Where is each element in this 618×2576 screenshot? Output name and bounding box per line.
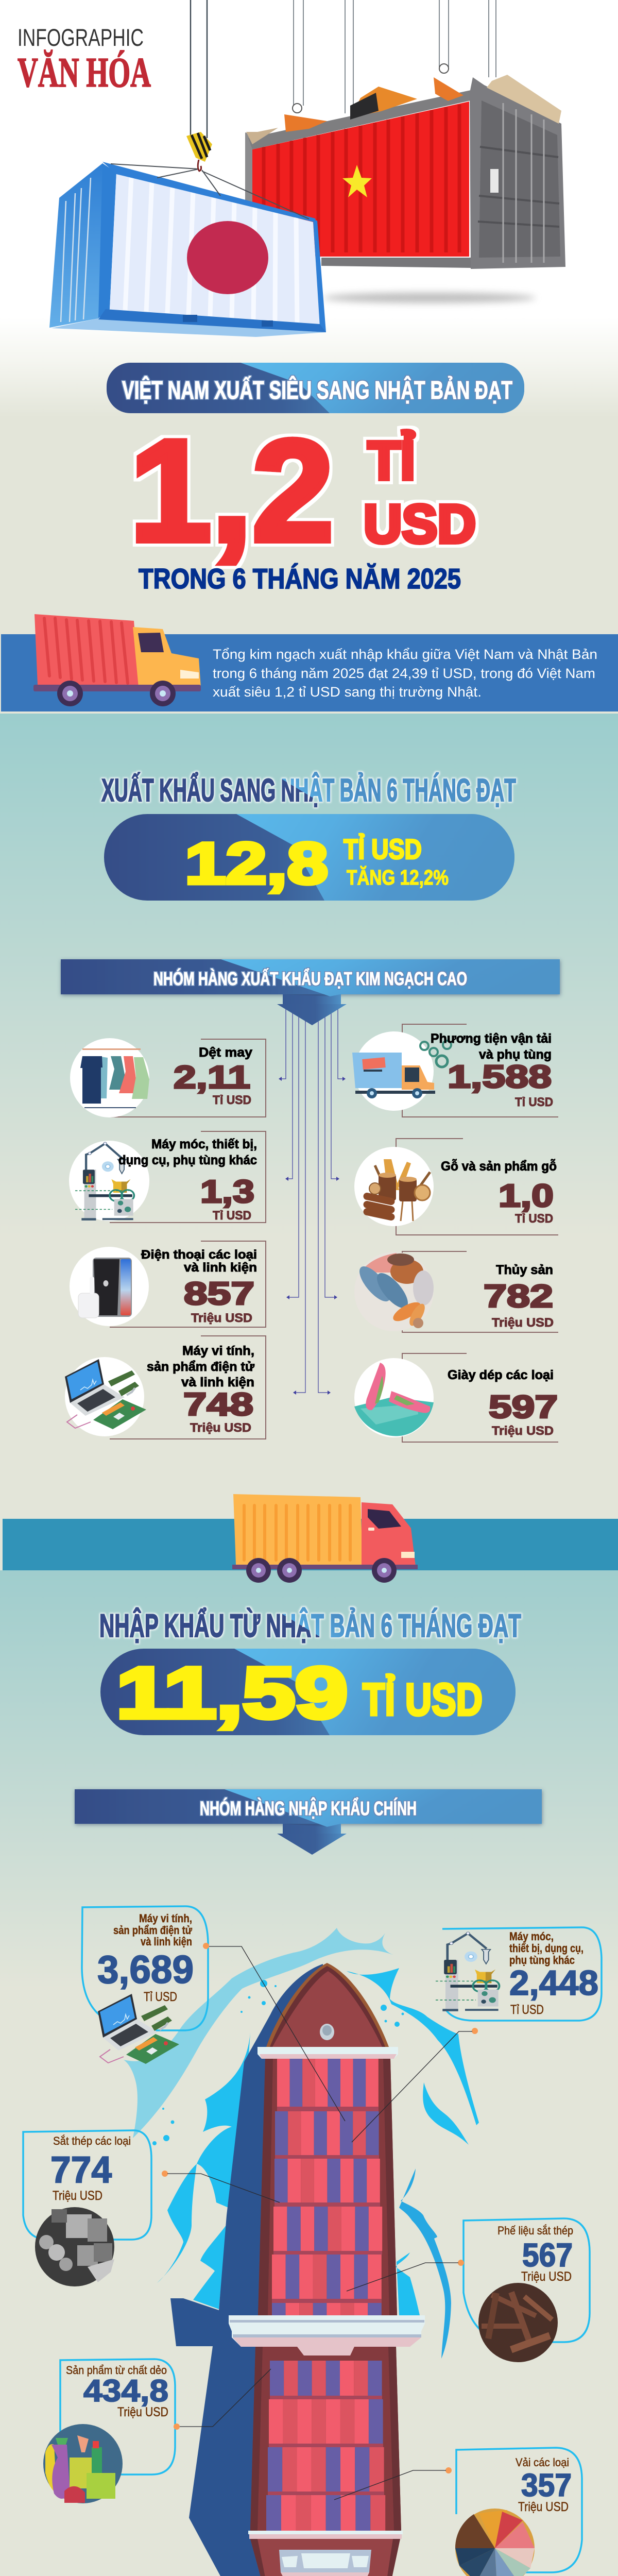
- value: 597: [489, 1389, 558, 1425]
- card: phones: [70, 1241, 266, 1327]
- text block: summary: Tổng kim ngạch xuất nhập khẩu giữa Việt Nam và Nhật Bản: [213, 647, 597, 662]
- banner: export group heading with arrow: [61, 959, 560, 1025]
- icon: steel bars: [35, 2207, 114, 2286]
- leader line: [203, 1943, 345, 2121]
- label: Phế liệu sắt thép: [497, 2224, 573, 2237]
- value: 782: [484, 1279, 553, 1314]
- icon: laptop: [98, 1994, 179, 2064]
- headline value: 1,2 tỉ USD: TỈ: [368, 430, 415, 491]
- text block: summary: [213, 647, 597, 700]
- background: import section gradient: [0, 1570, 618, 2576]
- label: Máy móc,: [509, 1930, 554, 1943]
- label: và phụ tùng: [479, 1047, 552, 1062]
- unit: Tỉ USD: [144, 1990, 177, 2004]
- value: 567: [522, 2236, 573, 2274]
- unit: Triệu USD: [117, 2405, 168, 2419]
- label: Sắt thép các loại: [53, 2134, 131, 2147]
- water splash around ship: [124, 1928, 479, 2576]
- card: vehicles: [352, 1024, 558, 1117]
- pill: import value: 11,59: [116, 1652, 348, 1733]
- deck: forward: [258, 2047, 398, 2059]
- unit: Tỉ USD: [515, 1212, 553, 1226]
- callout: fabrics: [334, 2448, 582, 2576]
- label: Máy vi tính,: [182, 1344, 254, 1358]
- logo: Infographic Văn Hóa: INFOGRAPHIC: [18, 24, 144, 51]
- unit: Triệu USD: [492, 1424, 554, 1438]
- label: phụ tùng khác: [509, 1954, 575, 1967]
- value: 357: [521, 2468, 572, 2503]
- value: 774: [50, 2149, 112, 2191]
- card: machinery: [69, 1131, 266, 1223]
- leader line: [162, 2171, 280, 2202]
- icon: logs and timber: [354, 1147, 434, 1226]
- unit: Tỉ USD: [515, 1095, 553, 1109]
- icon: red truck: [33, 614, 201, 706]
- unit: Triệu USD: [190, 1421, 251, 1435]
- unit: Tỉ USD: [510, 2003, 544, 2017]
- label: Máy móc, thiết bị,: [151, 1137, 257, 1151]
- icon: phone and earbuds: [70, 1247, 149, 1326]
- icon: laptop and circuit board: [65, 1357, 146, 1436]
- headline value: 1,2 tỉ USD: USD: [364, 494, 476, 554]
- logo: Infographic Văn Hóa: [18, 24, 151, 96]
- hero illustration: hanging containers: [49, 0, 565, 337]
- icon: factory machine: [69, 1141, 149, 1221]
- logo: Infographic Văn Hóa: VĂN HÓA: [18, 49, 151, 96]
- leader line: [352, 2028, 478, 2142]
- label: [141, 1248, 257, 1275]
- label: Vải các loại: [516, 2456, 569, 2469]
- label: Phương tiện vận tải: [431, 1031, 552, 1046]
- leader line: [347, 2260, 464, 2291]
- container: Vietnam flag: [245, 64, 565, 269]
- card: textiles: [70, 1038, 266, 1117]
- deck: stern: [248, 2531, 403, 2576]
- label: Dệt may: [199, 1045, 252, 1060]
- banner: export group heading with arrow: NHÓM HÀNG XUẤT KHẨU ĐẠT KIM NGẠCH CAO: [153, 968, 467, 989]
- label: Thủy sản: [496, 1263, 553, 1277]
- label: Máy vi tính,: [139, 1912, 192, 1925]
- value: 1,0: [499, 1178, 554, 1214]
- panel: summary band: [1, 614, 618, 711]
- banner: import group heading with arrow: [75, 1789, 542, 1855]
- unit: Triệu USD: [492, 1316, 554, 1330]
- label: và linh kiện: [141, 1935, 192, 1948]
- container: Japan flag: [49, 162, 326, 337]
- card: wood: [354, 1139, 558, 1235]
- unit: Triệu USD: [53, 2189, 102, 2203]
- icon: factory machine: [436, 1932, 500, 2011]
- subtitle: period: TRONG 6 THÁNG NĂM 2025: [139, 563, 461, 595]
- value: 748: [183, 1387, 253, 1422]
- callout: computers import: [82, 1906, 345, 2121]
- value: 1,588: [448, 1059, 552, 1095]
- value: 1,3: [200, 1174, 254, 1210]
- unit: Tỉ USD: [213, 1209, 251, 1223]
- headline value: 1,2 tỉ USD: 1,2: [130, 411, 334, 571]
- pill: export value: [104, 814, 514, 901]
- card: footwear: [354, 1353, 558, 1442]
- icon: clothes rack: [70, 1038, 149, 1117]
- value: 3,689: [97, 1948, 194, 1992]
- label: Giày dép các loại: [448, 1368, 554, 1382]
- background: upper section: [0, 0, 618, 714]
- label: [118, 1137, 257, 1167]
- unit: Triệu USD: [518, 2500, 569, 2514]
- pill: import value: [100, 1649, 516, 1735]
- card: computers: [65, 1336, 266, 1439]
- crane ropes: [191, 0, 496, 138]
- label: sản phẩm điện tử: [113, 1924, 192, 1937]
- icon: pink shoes: [354, 1358, 434, 1437]
- callout: plastics: [43, 2359, 271, 2503]
- label: dụng cụ, phụ tùng khác: [118, 1153, 257, 1167]
- label: [147, 1344, 255, 1389]
- illustration: container ship: [170, 1963, 425, 2576]
- deck: bridge: [229, 2315, 425, 2355]
- icon: orange truck: [232, 1494, 418, 1583]
- shadow under container: [323, 293, 536, 303]
- value: 2,11: [174, 1060, 250, 1095]
- text block: summary: trong 6 tháng năm 2025 đạt 24,39 tỉ USD, trong đó Việt Nam: [213, 666, 595, 681]
- leader line: [334, 2467, 452, 2500]
- icon: fish and shrimp: [354, 1252, 434, 1331]
- label: sản phẩm điện tử: [147, 1360, 255, 1374]
- value: 857: [184, 1276, 254, 1312]
- pill: export value: 12,8: [185, 831, 328, 896]
- icon: fabric swatches: [455, 2509, 535, 2576]
- icon: delivery truck: [352, 1031, 451, 1111]
- crane hook and slings: [111, 132, 309, 219]
- label: [509, 1930, 583, 1967]
- title pill: [107, 363, 524, 413]
- label: thiết bị, dụng cụ,: [509, 1942, 583, 1955]
- callout: steel scrap: [347, 2218, 590, 2362]
- headline value: 1,2 tỉ USD: [130, 411, 476, 571]
- callout: machinery import: [352, 1927, 602, 2142]
- banner: import group heading with arrow: NHÓM HÀNG NHẬP KHẨU CHÍNH: [200, 1797, 417, 1820]
- label: Gỗ và sản phẩm gỗ: [441, 1158, 557, 1174]
- card: seafood: [354, 1251, 558, 1332]
- ship hull: [258, 2059, 397, 2315]
- connector lines: export groups: [279, 1004, 346, 1395]
- label: [431, 1031, 552, 1062]
- pill: export value: TỈ USD: [344, 833, 422, 865]
- unit: Triệu USD: [191, 1311, 252, 1325]
- unit: Triệu USD: [521, 2269, 572, 2284]
- text block: summary: xuất siêu 1,2 tỉ USD sang thị trường Nhật.: [213, 684, 482, 700]
- label: và linh kiện: [184, 1261, 257, 1275]
- label: Điện thoại các loại: [141, 1248, 257, 1262]
- value: 434,8: [83, 2374, 168, 2408]
- icon: scrap metal: [478, 2283, 558, 2362]
- value: 2,448: [509, 1963, 598, 2003]
- leader line: [174, 2369, 271, 2430]
- pill: import value: TỈ USD: [363, 1674, 483, 1725]
- band behind import truck: [3, 1519, 618, 1570]
- label: Sản phẩm từ chất dẻo: [66, 2364, 167, 2377]
- label: [113, 1912, 192, 1948]
- callout: steel: [23, 2130, 280, 2286]
- ship shadow hull: [170, 1964, 324, 2576]
- icon: plastic products: [43, 2424, 123, 2503]
- background: export section gradient: [0, 714, 618, 1520]
- pill: export value: TĂNG 12,2%: [347, 866, 449, 889]
- unit: Tỉ USD: [213, 1093, 251, 1107]
- ship bow: [266, 1963, 389, 2047]
- label: và linh kiện: [181, 1375, 254, 1389]
- container rows: [266, 2059, 385, 2531]
